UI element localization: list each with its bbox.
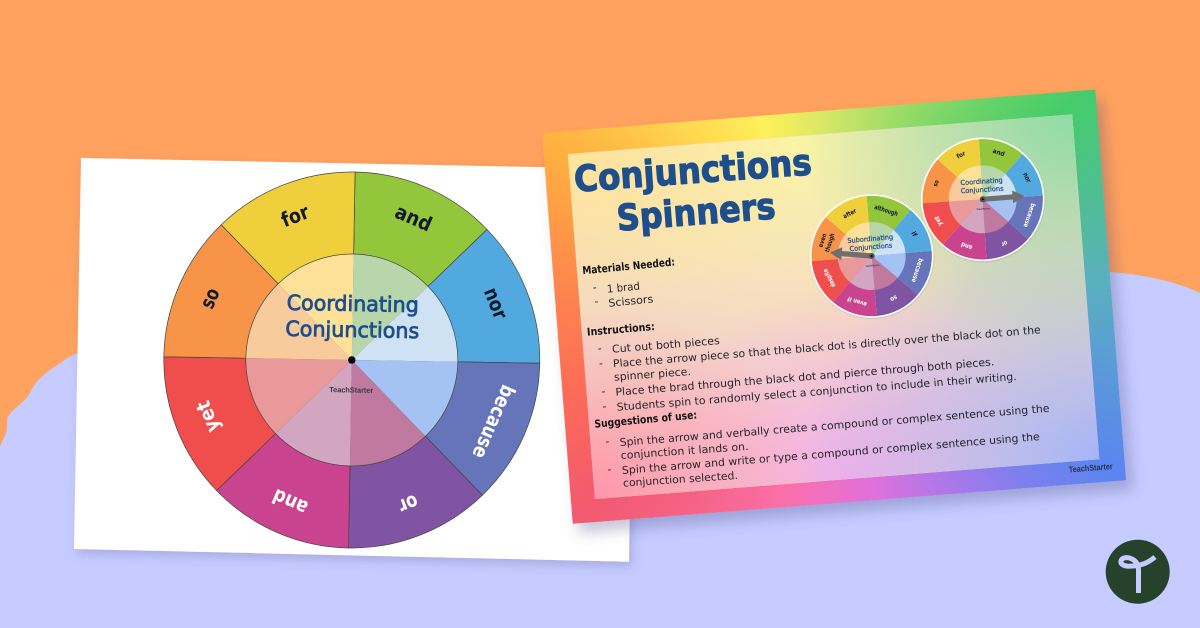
small spinner: subordinating conjunctions: after (842, 206, 858, 220)
small spinner: subordinating conjunctions: though (823, 232, 837, 253)
instructions list (597, 324, 1041, 414)
small spinner: subordinating conjunctions: Conjunctions (849, 241, 893, 253)
icon: brand logo (1106, 540, 1170, 604)
small spinner: coordinating conjunctions: yet (933, 215, 944, 227)
spinner title (285, 291, 420, 343)
small spinner: subordinating conjunctions: even if (846, 295, 868, 308)
materials section (582, 255, 676, 310)
wedge labels: because (467, 381, 521, 462)
small spinner: subordinating conjunctions (805, 189, 939, 323)
small spinner: subordinating conjunctions: even (817, 232, 829, 248)
poster title (573, 142, 813, 240)
poster title: Spinners (615, 186, 777, 240)
brand mark: TeachStarter (329, 385, 373, 395)
small spinner: subordinating conjunctions: despite (821, 267, 837, 289)
poster title: Conjunctions (573, 142, 813, 201)
spinner title: Coordinating (287, 291, 419, 317)
materials list: - (594, 296, 599, 308)
outer wedges (161, 169, 543, 551)
small spinner: coordinating conjunctions: so (931, 179, 941, 188)
instructions list: - (601, 386, 606, 398)
small spinner: coordinating conjunctions: or (999, 239, 1009, 249)
materials heading: Materials Needed: (582, 255, 676, 277)
small spinner: coordinating conjunctions (917, 134, 1048, 265)
small spinner: coordinating conjunctions: nor (1021, 171, 1033, 185)
small spinner: coordinating conjunctions: Conjunctions (960, 185, 1004, 195)
small spinner: subordinating conjunctions: if (909, 230, 919, 238)
instructions list: spinner piece. (614, 366, 691, 384)
wedge labels (188, 196, 524, 524)
poster inner panel (568, 114, 1099, 499)
materials list (592, 281, 654, 310)
small spinner: coordinating conjunctions: and (992, 147, 1006, 158)
small spinner: subordinating conjunctions: TeachStarter (865, 264, 880, 268)
wedge labels: for (278, 199, 313, 232)
instructions list: Cut out both pieces (612, 335, 720, 356)
suggestions list: - (607, 464, 612, 476)
icon: spinner arrow left (829, 246, 875, 263)
suggestions heading: Suggestions of use: (594, 408, 698, 431)
instructions list: - (597, 343, 602, 355)
poster brand mark: TeachStarter (1068, 461, 1114, 474)
suggestions list: Spin the arrow and write or type a compound or complex sentence using the (622, 431, 1040, 477)
instructions list: Students spin to randomly select a conjunction to include in their writing. (616, 371, 1017, 414)
small spinner: coordinating conjunctions: TeachStarter (976, 207, 990, 211)
inner wedges (244, 252, 460, 468)
wedge labels: or (395, 490, 422, 519)
big spinner wheel (161, 169, 543, 551)
wedge labels: yet (190, 397, 225, 436)
small spinner: subordinating conjunctions: because (909, 257, 925, 284)
instructions list: Place the brad through the black dot and pierce through both pieces. (615, 356, 995, 399)
suggestions section (594, 403, 1050, 490)
materials list: - (592, 282, 597, 294)
materials list: Scissors (608, 293, 654, 310)
materials list: 1 brad (606, 281, 640, 296)
instructions list: Place the arrow piece so that the black dot is directly over the black dot on the (613, 324, 1041, 370)
white sheet with big spinner (74, 158, 635, 562)
instructions list: - (599, 358, 604, 370)
suggestions list: Spin the arrow and verbally create a compound or complex sentence using the (619, 403, 1050, 449)
background: lavender shape (0, 272, 1200, 628)
wedge labels: and (269, 484, 311, 520)
poster (542, 89, 1126, 523)
instructions section (586, 320, 1041, 414)
suggestions list: conjunction selected. (623, 470, 738, 490)
spinner title: Conjunctions (285, 317, 420, 343)
instructions heading: Instructions: (586, 320, 655, 339)
centre dot (348, 356, 356, 364)
suggestions list: conjunction it lands on. (620, 441, 749, 462)
suggestions list: - (605, 436, 610, 448)
small spinner: subordinating conjunctions: so (888, 293, 899, 304)
small spinner: subordinating conjunctions: although (873, 203, 899, 218)
small spinner: coordinating conjunctions: and (960, 240, 973, 252)
small spinner: coordinating conjunctions: because (1021, 202, 1037, 229)
small spinner: coordinating conjunctions: for (955, 149, 967, 161)
small spinner: coordinating conjunctions: Coordinating (960, 176, 1003, 187)
small spinner: subordinating conjunctions: Subordinating (847, 233, 893, 245)
wedge labels: and (391, 199, 436, 236)
wedge labels: so (195, 284, 225, 312)
wedge labels: nor (479, 284, 513, 323)
icon: spinner arrow right (979, 190, 1025, 206)
sheet (74, 158, 635, 562)
suggestions list (605, 403, 1050, 490)
instructions list: - (602, 401, 607, 413)
